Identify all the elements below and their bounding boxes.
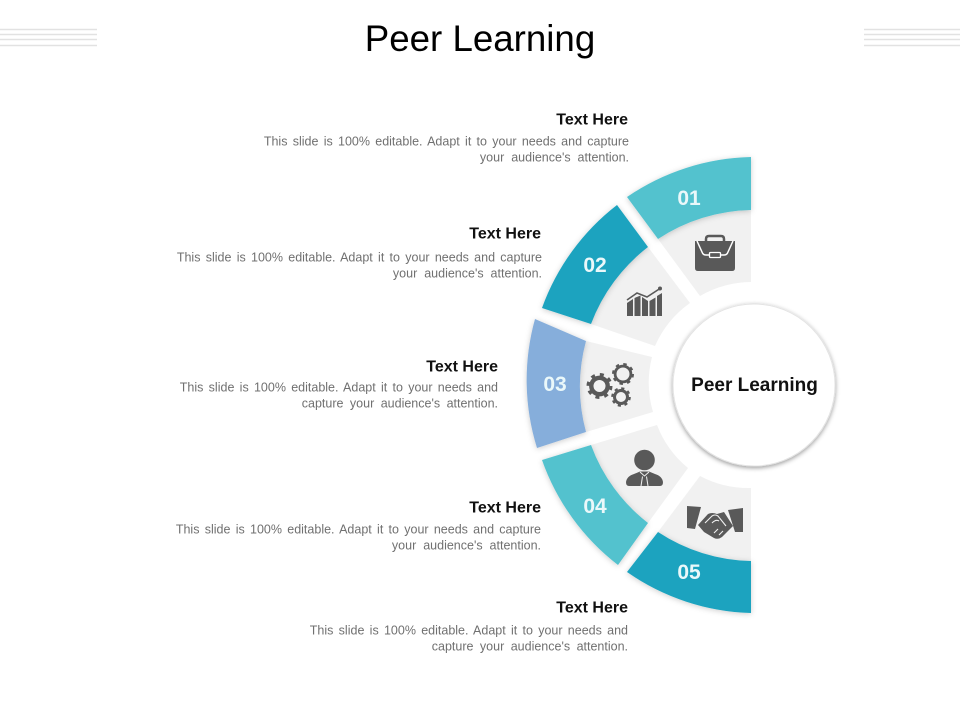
title: Peer Learning xyxy=(365,18,595,59)
text block 03: capture your audience's attention. xyxy=(302,396,498,410)
segment 03: 03 xyxy=(543,373,567,396)
icon: growth chart xyxy=(627,286,662,316)
decorative lines top right xyxy=(864,30,960,46)
text block 01: your audience's attention. xyxy=(480,150,629,164)
center label: Peer Learning xyxy=(691,375,818,396)
segment 01: 01 xyxy=(677,187,701,210)
text block 04: Text Here xyxy=(469,500,541,516)
text block 02: your audience's attention. xyxy=(393,266,542,280)
icon: gears xyxy=(588,364,633,406)
icon: handshake xyxy=(687,506,743,539)
icon: businessman xyxy=(626,450,663,486)
text block 04: your audience's attention. xyxy=(392,538,541,552)
segment 03 xyxy=(527,319,653,448)
text block 05: This slide is 100% editable. Adapt it to your needs and xyxy=(310,624,628,638)
segment 04: 04 xyxy=(583,495,607,518)
text block 05: capture your audience's attention. xyxy=(432,640,628,654)
text block 01: Text Here xyxy=(556,112,628,128)
text block 03: This slide is 100% editable. Adapt it to your needs and xyxy=(180,380,498,394)
text block 05: Text Here xyxy=(556,600,628,616)
segment 02: 02 xyxy=(583,254,607,277)
segment 02 xyxy=(542,205,690,346)
center circle xyxy=(673,304,835,466)
text block 03: Text Here xyxy=(426,358,498,376)
icon: briefcase xyxy=(695,236,735,271)
text block 02: This slide is 100% editable. Adapt it to your needs and capture xyxy=(177,250,542,264)
segment 01 xyxy=(627,157,751,296)
segment 04 xyxy=(542,425,688,565)
text block 02 xyxy=(177,226,542,280)
text block 03 xyxy=(180,358,498,410)
text block 01 xyxy=(264,112,629,164)
decorative lines top left xyxy=(0,30,97,46)
text block 02: Text Here xyxy=(469,226,541,242)
text block 04 xyxy=(176,500,541,552)
segment 05 xyxy=(627,476,751,613)
text block 04: This slide is 100% editable. Adapt it to your needs and capture xyxy=(176,522,541,536)
text block 01: This slide is 100% editable. Adapt it to your needs and capture xyxy=(264,134,629,148)
text block 05 xyxy=(310,600,628,654)
segment 05: 05 xyxy=(677,561,701,584)
